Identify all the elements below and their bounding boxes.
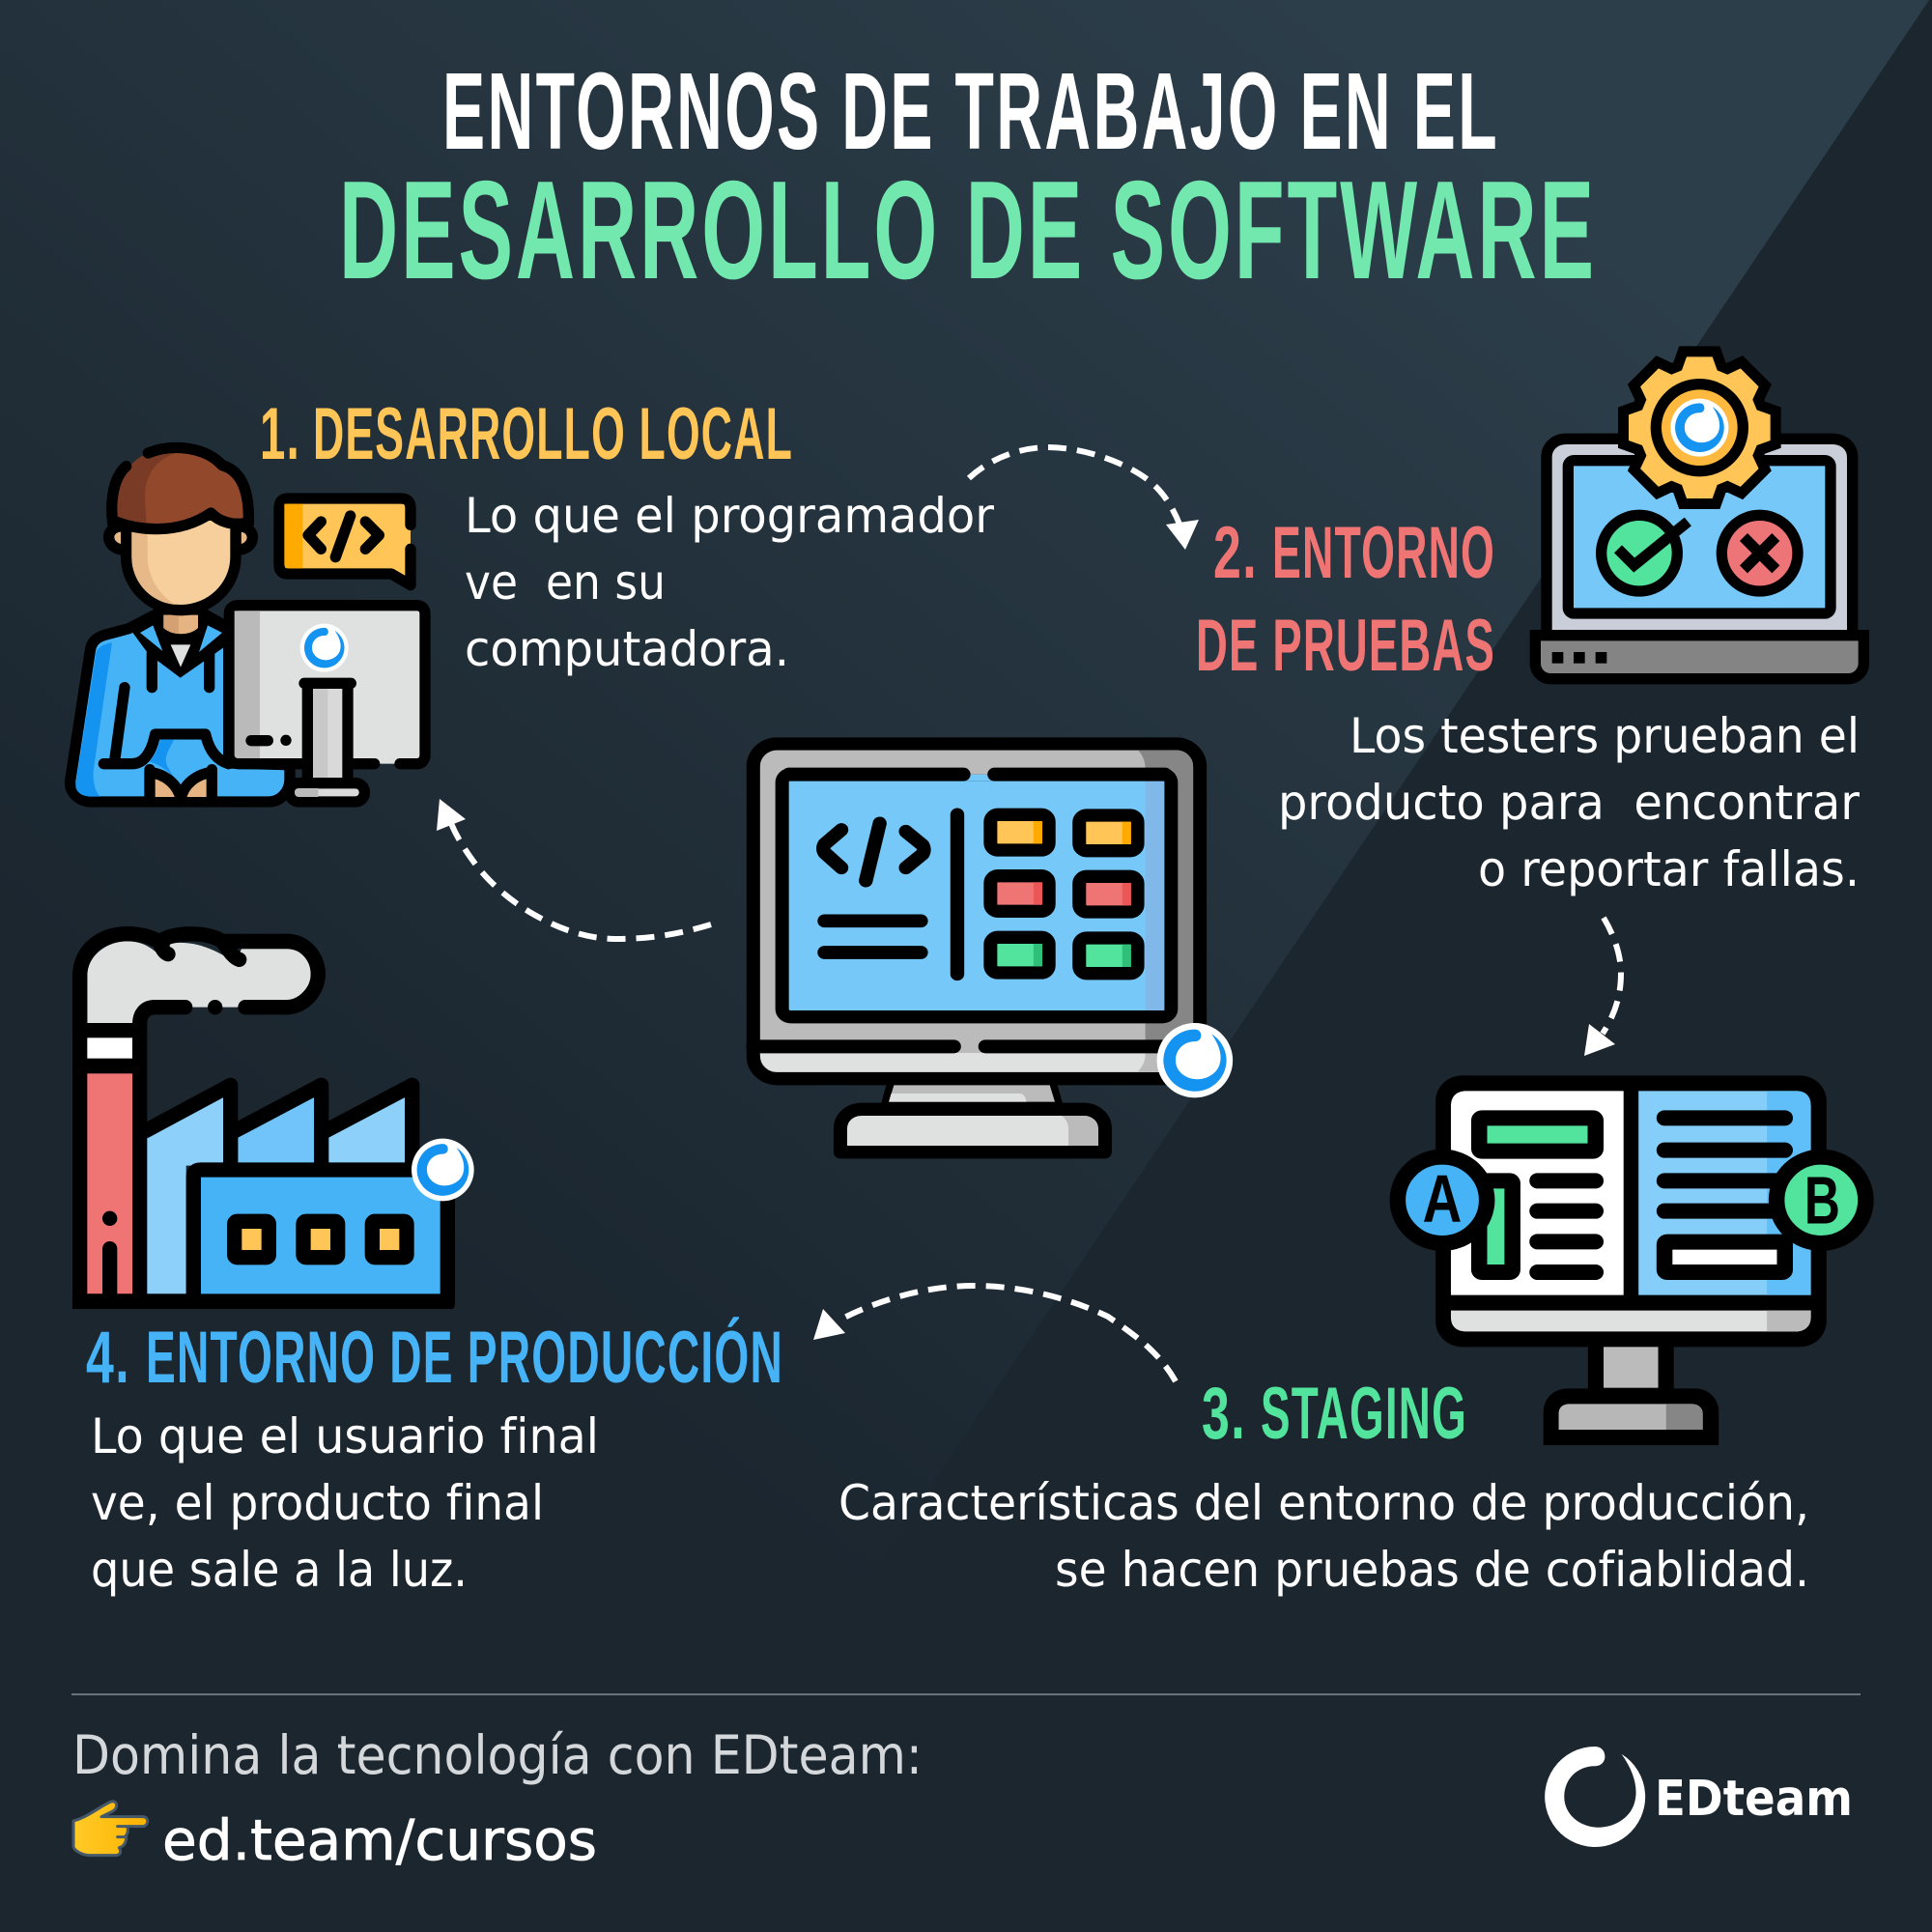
arrow: staging to produccion bbox=[813, 1286, 1176, 1381]
heading: 2. entorno de pruebas bbox=[1196, 512, 1495, 687]
footer divider bbox=[71, 1693, 1861, 1695]
monitor stand bbox=[1544, 1339, 1719, 1445]
icon: factory bbox=[72, 934, 474, 1309]
text: entorno de pruebas: Los testers prueban el bbox=[1350, 708, 1860, 764]
badge B: B bbox=[1804, 1163, 1840, 1237]
monitor stand bbox=[840, 1082, 1105, 1152]
text: desarrollo local: computadora. bbox=[465, 621, 789, 677]
logo on monitor bbox=[300, 624, 349, 672]
icon: developer with monitor bbox=[71, 447, 425, 802]
text: desarrollo local: ve en su bbox=[465, 554, 666, 611]
footer bbox=[72, 1724, 1853, 1873]
logo on factory bbox=[412, 1139, 474, 1201]
heading: 4. entorno de produccion bbox=[86, 1317, 783, 1399]
arrow: pruebas to staging bbox=[1584, 918, 1621, 1056]
text: staging bbox=[838, 1475, 1809, 1598]
gear bbox=[1629, 356, 1771, 498]
laptop bbox=[1535, 439, 1863, 679]
icon: laptop with gear bbox=[1535, 356, 1863, 679]
text: staging: Características del entorno de producción, bbox=[838, 1475, 1809, 1531]
heading: 1. desarrollo local: DESARROLLO LOCAL bbox=[313, 393, 793, 475]
monitor body bbox=[1435, 1075, 1827, 1347]
speech bubble bbox=[279, 498, 411, 585]
panel: central monitor bbox=[753, 744, 1233, 1152]
badge A: A bbox=[1423, 1161, 1462, 1236]
call to action: Domina la tecnología con EDteam: bbox=[72, 1724, 923, 1786]
heading: 1. desarrollo local: 1. bbox=[260, 393, 300, 475]
text: entorno de produccion: ve, el producto final bbox=[91, 1475, 544, 1531]
logo: EDteam bbox=[1545, 1747, 1853, 1847]
text: desarrollo local bbox=[465, 488, 994, 677]
heading: 1. desarrollo local bbox=[260, 393, 793, 475]
factory sheds bbox=[145, 1085, 412, 1293]
heading: 4. entorno de produccion: 4. bbox=[86, 1317, 130, 1399]
text: entorno de pruebas bbox=[1278, 708, 1860, 897]
heading: 4. entorno de produccion: ENTORNO DE PRODUCCIÓN bbox=[146, 1317, 783, 1399]
error circle bbox=[1721, 515, 1798, 591]
text: entorno de produccion bbox=[91, 1408, 599, 1598]
logo: EDteam: EDteam bbox=[1655, 1771, 1853, 1828]
badge A bbox=[1398, 1157, 1487, 1243]
heading: 2. entorno de pruebas: 2. bbox=[1213, 512, 1258, 594]
heading: 3. staging bbox=[1202, 1373, 1467, 1455]
ears and face bbox=[109, 526, 127, 550]
title bbox=[339, 50, 1597, 308]
monitor screen bbox=[782, 766, 1171, 1017]
colored tiles bbox=[990, 814, 1138, 974]
panel: desarrollo local bbox=[71, 393, 994, 802]
panel: staging bbox=[838, 1075, 1865, 1598]
hoodie bbox=[71, 613, 290, 802]
chimney and smoke bbox=[72, 934, 318, 1309]
check circle bbox=[1602, 515, 1688, 591]
heading: 2. entorno de pruebas: ENTORNO bbox=[1272, 512, 1495, 594]
heading: 3. staging: STAGING bbox=[1261, 1373, 1467, 1455]
heading: 2. entorno de pruebas: DE PRUEBAS bbox=[1196, 605, 1495, 687]
arrow: central monitor to desarrollo bbox=[437, 799, 711, 939]
code symbol and lines bbox=[823, 814, 957, 974]
panel: entorno de pruebas bbox=[1196, 356, 1863, 897]
icon: A/B test monitor bbox=[1398, 1075, 1865, 1445]
factory building bbox=[72, 1170, 455, 1309]
icon: pointing hand bbox=[73, 1802, 148, 1856]
text: entorno de pruebas: o reportar fallas. bbox=[1478, 841, 1860, 897]
logo on monitor bbox=[1157, 1023, 1233, 1097]
text: entorno de produccion: que sale a la luz. bbox=[91, 1542, 468, 1598]
hair bbox=[117, 451, 244, 528]
monitor frame bbox=[753, 744, 1200, 1079]
link: ed.team/cursos bbox=[162, 1807, 597, 1873]
arrow: desarrollo to pruebas bbox=[969, 447, 1199, 550]
panel: entorno de produccion bbox=[72, 934, 783, 1598]
text: desarrollo local: Lo que el programador bbox=[465, 488, 994, 544]
screen content bbox=[1479, 1118, 1785, 1272]
badge B bbox=[1776, 1157, 1865, 1243]
text: staging: se hacen pruebas de cofiablidad. bbox=[1055, 1542, 1809, 1598]
text: entorno de pruebas: producto para encontrar bbox=[1278, 775, 1860, 831]
heading: 3. staging: 3. bbox=[1202, 1373, 1246, 1455]
monitor back bbox=[229, 606, 425, 802]
text: entorno de produccion: Lo que el usuario final bbox=[91, 1408, 599, 1464]
